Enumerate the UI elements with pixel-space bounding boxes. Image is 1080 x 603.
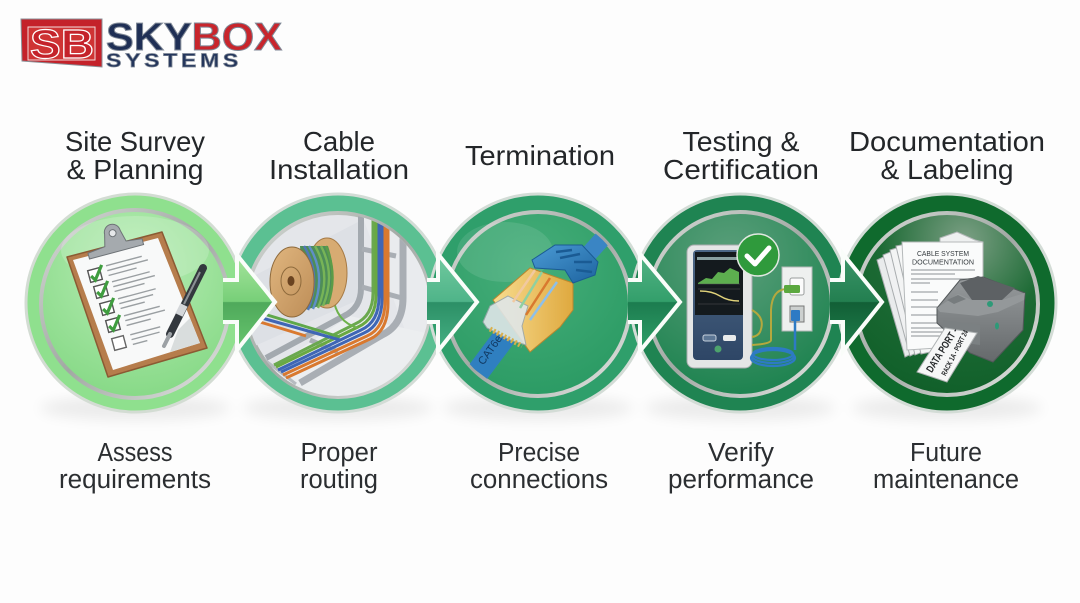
title: documentation and labeling: & Labeling: [880, 154, 1014, 185]
coloured cables: [260, 213, 388, 378]
description: future maintenance: Future: [910, 439, 982, 467]
cable lower with label: CAT6e: [476, 333, 505, 367]
logo tagline: SYSTEMS: [106, 51, 242, 72]
description: precise connections: Precise: [498, 439, 580, 467]
logo badge: [21, 19, 102, 67]
illustration: cable tray and spool: [252, 216, 427, 396]
panel: step 3 termination circle: [429, 194, 647, 412]
description: proper routing: routing: [300, 466, 378, 494]
panel: step 1 site survey circle: [26, 194, 244, 412]
printed label: DATA PORT -: [924, 326, 961, 375]
arrow: step 1 to step 2: [223, 255, 275, 350]
icon: stack of documents: [877, 232, 983, 357]
title: documentation and labeling: Documentation: [849, 126, 1045, 157]
logo badge: SB: [30, 21, 94, 67]
document heading: CABLE SYSTEM: [917, 249, 969, 258]
icon: cable tester: [687, 245, 752, 368]
infographic canvas: [20, 18, 1058, 494]
arrow: step 4 to step 5: [830, 254, 882, 351]
clear plug: [483, 296, 528, 345]
title: testing and certification: Testing &: [682, 126, 800, 157]
icon: clipboard with checklist: [67, 218, 207, 377]
arrow: step 2 to step 3: [427, 254, 477, 351]
checklist rows: [87, 253, 167, 350]
panel: step 4 testing circle: [631, 194, 849, 412]
panel: step 2 cable installation circle: [229, 194, 447, 412]
soft shadows below circles: [40, 396, 1042, 420]
description: future maintenance: maintenance: [873, 466, 1019, 494]
description: proper routing: Proper: [300, 439, 378, 467]
cable tray rails: [266, 212, 361, 358]
logo wordmark: SKYBOX: [106, 16, 282, 59]
cable upper: [584, 234, 608, 259]
icon: label printer: [937, 276, 1025, 362]
description: verify performance: performance: [668, 466, 814, 494]
step titles: [65, 126, 1045, 185]
icon: wall outlet and cables: [751, 267, 812, 366]
title: cable installation: Installation: [269, 154, 409, 185]
title: cable installation: Cable: [303, 126, 375, 157]
title: termination: Termination: [465, 140, 615, 171]
description: precise connections: connections: [470, 466, 608, 494]
icon: pen: [164, 268, 203, 346]
printed label: [917, 326, 977, 382]
title: site survey: Site Survey: [65, 126, 205, 157]
blue boot: [532, 245, 598, 283]
icon: CAT6e RJ45 connector: [476, 228, 612, 372]
wires: [513, 270, 557, 320]
arrow: step 3 to step 4: [628, 254, 680, 351]
description: assess requirements: Assess: [98, 439, 172, 467]
document heading: DOCUMENTATION: [912, 258, 974, 266]
gold shield: [493, 268, 573, 352]
logo: Skybox Systems: [21, 16, 282, 72]
clipboard clip: [82, 218, 144, 259]
description: verify performance: Verify: [708, 439, 774, 467]
icon: green check badge: [737, 234, 779, 276]
step descriptions: [59, 439, 1019, 494]
title: site survey: & Planning: [66, 154, 204, 185]
printed label: RACK 1A - PORT 24: [939, 328, 970, 377]
panel: step 5 documentation circle: [838, 194, 1056, 412]
title: testing and certification: Certification: [663, 154, 819, 185]
cable spool: [270, 238, 347, 317]
description: assess requirements: requirements: [59, 466, 211, 494]
